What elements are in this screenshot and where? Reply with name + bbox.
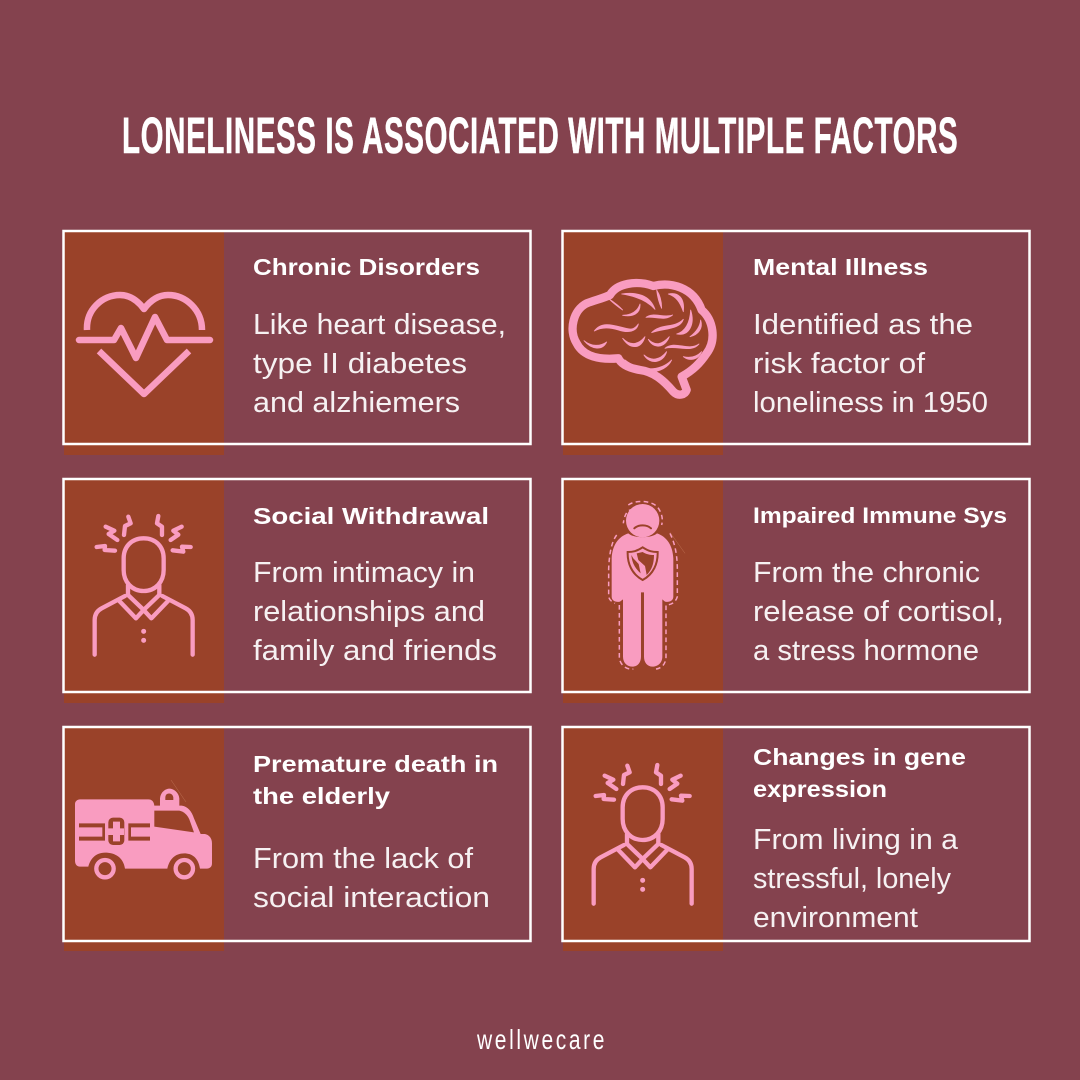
text: chronic disorders description: type II diabetes (253, 348, 467, 380)
panel: social withdrawal (64, 479, 530, 703)
heading: social withdrawal: Social Withdrawal (253, 503, 489, 529)
heading: changes in gene expression: Changes in gene (753, 744, 966, 770)
text: changes in gene expression description: environment (753, 902, 918, 934)
heading: premature death: the elderly (253, 783, 390, 809)
heading: chronic disorders: Chronic Disorders (253, 254, 480, 280)
text: social withdrawal description: From intimacy in (253, 557, 475, 589)
text: mental illness description: risk factor of (753, 348, 926, 380)
text: changes in gene expression description (753, 824, 959, 934)
heading: changes in gene expression (753, 744, 966, 802)
text: premature death description: social interaction (253, 882, 490, 914)
heading: premature death (253, 751, 498, 809)
text: social withdrawal description: family and friends (253, 635, 497, 667)
panel: premature death (64, 727, 530, 951)
text: changes in gene expression description: stressful, lonely (753, 863, 951, 895)
text: mental illness description: Identified as the (753, 309, 973, 341)
panel: changes in gene expression (562, 727, 1030, 951)
heading: premature death: Premature death in (253, 751, 498, 777)
heading: impaired immune system: Impaired Immune Sys (753, 503, 1007, 528)
heading: mental illness: Mental Illness (753, 254, 928, 280)
text: impaired immune system description: From the chronic (753, 557, 980, 589)
text: premature death description (253, 843, 490, 914)
icon: ambulance (75, 780, 212, 877)
panel: impaired immune system (562, 479, 1030, 703)
text: mental illness description: loneliness in 1950 (753, 387, 988, 419)
icon: stressed person (594, 765, 692, 904)
icon: person with broken shield (609, 501, 685, 669)
text: chronic disorders description (253, 309, 506, 419)
text: changes in gene expression description: From living in a (753, 824, 959, 856)
text: mental illness description (753, 309, 988, 419)
icon: brain (573, 283, 713, 395)
text: social withdrawal description: relationships and (253, 596, 485, 628)
title: LONELINESS IS ASSOCIATED WITH MULTIPLE FACTORS (122, 107, 958, 164)
text: impaired immune system description (753, 557, 1004, 667)
text: impaired immune system description: release of cortisol, (753, 596, 1004, 628)
icon: heart with pulse (79, 295, 210, 394)
panel: chronic disorders (64, 231, 530, 455)
heading: changes in gene expression: expression (753, 776, 887, 802)
text: premature death description: From the lack of (253, 843, 474, 875)
text: social withdrawal description (253, 557, 497, 667)
text: chronic disorders description: Like heart disease, (253, 309, 506, 341)
brand logo: wellwecare: wellwecare (476, 1025, 605, 1056)
panel: mental illness (562, 231, 1030, 455)
text: impaired immune system description: a stress hormone (753, 635, 979, 667)
icon: stressed person (95, 516, 193, 655)
text: chronic disorders description: and alzhiemers (253, 387, 460, 419)
